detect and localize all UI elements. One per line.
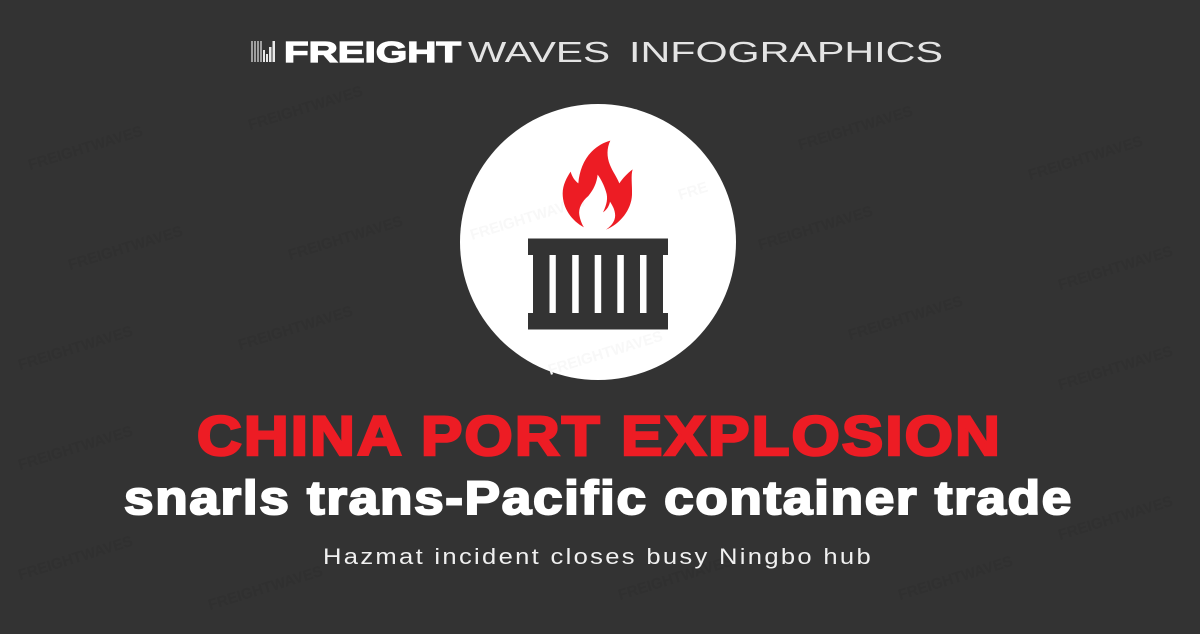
icon: shipping container (528, 238, 668, 330)
infographic canvas: FREIGHTWAVES (796, 103, 915, 154)
infographic canvas: FREIGHTWAVES (236, 303, 355, 354)
icon: FreightWaves logo mark (251, 41, 275, 62)
infographic canvas: FREIGHTWAVES (16, 533, 135, 584)
icon: burning container in circle: FRE (676, 179, 710, 204)
infographic canvas: FREIGHTWAVES (246, 83, 365, 134)
infographic canvas: FREIGHTWAVES (26, 123, 145, 174)
infographic canvas: FREIGHTWAVES (846, 293, 965, 344)
infographic canvas: FREIGHTWAVES (286, 213, 405, 264)
icon: burning container in circle: FREIGHTWAVES (546, 328, 665, 379)
white circle (460, 104, 736, 380)
icon: burning container in circle: FREIGHTWAVES (468, 193, 587, 244)
icon: burning container in circle (460, 104, 736, 380)
infographic canvas: FREIGHTWAVES (1026, 133, 1145, 184)
infographic canvas: FREIGHTWAVES (756, 203, 875, 254)
infographic canvas: FREIGHTWAVES (16, 423, 135, 474)
header logo and wordmark (251, 37, 943, 69)
infographic canvas: FREIGHTWAVES (206, 563, 325, 614)
icon: flame (563, 141, 633, 230)
infographic canvas: FREIGHTWAVES (1056, 493, 1175, 544)
infographic canvas: FREIGHTWAVES (66, 223, 185, 274)
infographic canvas: FREIGHTWAVES (16, 323, 135, 374)
wordmark: WAVES: WAVES (468, 37, 610, 69)
infographic canvas: FREIGHTWAVES (616, 553, 735, 604)
infographic canvas: FREIGHTWAVES (1056, 343, 1175, 394)
subtitle: snarls trans-Pacific container trade (124, 471, 1073, 524)
title: CHINA PORT EXPLOSION (197, 404, 1002, 467)
infographic canvas: FREIGHTWAVES (1056, 243, 1175, 294)
infographic canvas: FREIGHTWAVES (896, 553, 1015, 604)
wordmark: FREIGHT: FREIGHT (284, 37, 461, 69)
caption: Hazmat incident closes busy Ningbo hub (323, 544, 873, 569)
wordmark: INFOGRAPHICS: INFOGRAPHICS (629, 37, 943, 69)
